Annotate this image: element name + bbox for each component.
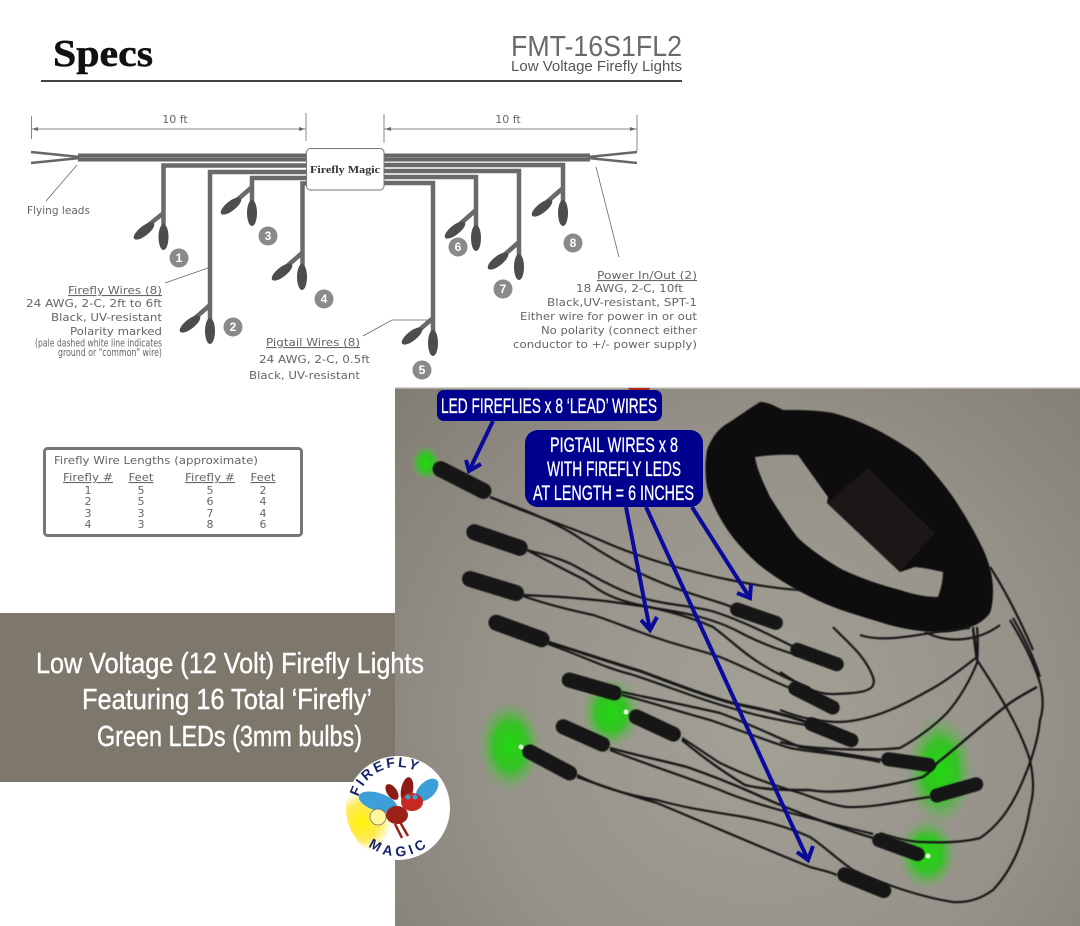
firefly wire 2 xyxy=(177,172,306,344)
label: pigtail wires: Black, UV-resistant xyxy=(249,369,361,382)
label: power in/out: Power In/Out (2) xyxy=(597,269,697,282)
LED bright points xyxy=(518,710,930,858)
junction box: Firefly Magic: Firefly Magic xyxy=(310,164,380,176)
table: firefly wire lengths: 1 xyxy=(84,484,92,497)
wire bundle xyxy=(490,497,1043,902)
label: firefly wires: Polarity marked xyxy=(70,325,162,338)
firefly wire 3: 3 xyxy=(265,229,272,243)
label: power in/out: 18 AWG, 2-C, 10ft xyxy=(576,282,684,295)
product subtitle: Low Voltage Firefly Lights xyxy=(511,58,682,75)
heading: Specs: Specs xyxy=(53,33,153,75)
firefly wire 3 xyxy=(218,178,306,246)
dimension: left 10 ft: 10 ft xyxy=(162,113,188,126)
firefly wire 2: 2 xyxy=(230,320,237,334)
callout: pigtail wires xyxy=(525,430,703,507)
table: firefly wire lengths: 5 xyxy=(138,484,144,497)
arrow: pigtail two xyxy=(692,507,751,598)
banner: product description: Green LEDs (3mm bulbs) xyxy=(97,721,362,753)
table: firefly wire lengths: 7 xyxy=(206,507,214,520)
label: firefly wires: ground or "common" wire) xyxy=(58,346,162,359)
callout: LED fireflies xyxy=(437,390,662,421)
arrow: pigtail one xyxy=(626,507,657,630)
callout: pigtail wires: AT LENGTH = 6 INCHES xyxy=(533,482,694,505)
callout: pigtail wires: PIGTAIL WIRES x 8 xyxy=(550,434,678,457)
firefly wire 7: 7 xyxy=(500,282,507,296)
model number: FMT-16S1FL2 xyxy=(511,31,682,63)
header xyxy=(41,31,682,82)
table: firefly wire lengths: 4 xyxy=(260,507,266,520)
table: firefly wire lengths: 3 xyxy=(138,507,144,520)
banner: product description: Featuring 16 Total ‘Firefly’ xyxy=(82,684,372,716)
label: pigtail wires: Pigtail Wires (8) xyxy=(266,336,360,349)
logo text xyxy=(350,757,426,856)
callout: LED fireflies: LED FIREFLIES x 8 ‘LEAD’ WIRES xyxy=(441,395,657,418)
photo: firefly light string xyxy=(395,387,1080,926)
table: firefly wire lengths: Firefly # xyxy=(63,471,113,484)
table: firefly wire lengths: 8 xyxy=(206,518,214,531)
table: firefly wire lengths: 3 xyxy=(138,518,144,531)
table: firefly wire lengths: Firefly # xyxy=(185,471,235,484)
firefly wire 4 xyxy=(269,184,334,308)
label: flying leads: Flying leads xyxy=(27,204,90,217)
firefly wire 8: 8 xyxy=(570,236,577,250)
logo wings xyxy=(356,774,443,817)
arrow: lead wires xyxy=(466,421,493,471)
label: power in/out: Either wire for power in or out xyxy=(520,310,698,323)
firefly wire 6 xyxy=(384,177,481,256)
logo text: MAGIC xyxy=(368,838,426,856)
firefly wire 8 xyxy=(384,165,582,252)
table: firefly wire lengths: 4 xyxy=(84,518,92,531)
table: firefly wire lengths: 2 xyxy=(84,495,92,508)
label: flying leads xyxy=(27,165,90,217)
table: firefly wire lengths: Feet xyxy=(128,471,154,484)
label: power in/out: Black,UV-resistant, SPT-1 xyxy=(547,296,697,309)
firefly wire 6: 6 xyxy=(455,240,462,254)
table: firefly wire lengths: 3 xyxy=(84,507,92,520)
table: firefly wire lengths: 5 xyxy=(206,484,214,497)
label: firefly wires: Black, UV-resistant xyxy=(51,311,163,324)
label: firefly wires: 24 AWG, 2-C, 2ft to 6ft xyxy=(26,297,163,310)
table: firefly wire lengths: Feet xyxy=(250,471,276,484)
table: firefly wire lengths: 6 xyxy=(260,518,266,531)
table: firefly wire lengths: 4 xyxy=(260,495,266,508)
banner: product description xyxy=(0,613,424,782)
dimension: right 10 ft: 10 ft xyxy=(495,113,521,126)
logo text: FIREFLY xyxy=(350,757,420,796)
callout: pigtail wires: WITH FIREFLY LEDS xyxy=(547,458,681,481)
label: power in/out: conductor to +/- power supply) xyxy=(513,338,697,351)
label: pigtail wires: 24 AWG, 2-C, 0.5ft xyxy=(259,353,371,366)
green LED glows xyxy=(411,445,974,890)
label: pigtail wires xyxy=(249,320,432,382)
wiring diagram xyxy=(26,113,698,382)
firefly wire 7 xyxy=(384,171,524,298)
junction box: Firefly Magic xyxy=(306,148,384,190)
firefly LED plugs xyxy=(430,458,985,900)
table: firefly wire lengths: 6 xyxy=(206,495,214,508)
label: firefly wires xyxy=(26,268,208,359)
dimension: left 10 ft xyxy=(32,113,306,141)
main wires and flying leads xyxy=(31,152,637,163)
table: firefly wire lengths: 2 xyxy=(260,484,266,497)
arrow: pigtail three xyxy=(646,507,813,860)
label: power in/out: No polarity (connect either xyxy=(541,324,697,337)
firefly wire 5 xyxy=(384,183,438,380)
label: power in/out xyxy=(513,167,698,351)
firefly wire 5: 5 xyxy=(419,363,426,377)
table: firefly wire lengths: 5 xyxy=(138,495,144,508)
firefly wire 4: 4 xyxy=(321,292,328,306)
firefly wire 1: 1 xyxy=(176,251,183,265)
logo firefly body xyxy=(370,776,423,838)
label: firefly wires: Firefly Wires (8) xyxy=(68,284,162,297)
dimension: right 10 ft xyxy=(384,113,637,151)
table: firefly wire lengths: Firefly Wire Lengths (approximate) xyxy=(54,454,258,467)
firefly wire 1 xyxy=(131,166,306,268)
cable coil and control box xyxy=(706,402,993,632)
table: firefly wire lengths xyxy=(44,448,302,536)
logo: Firefly Magic xyxy=(346,756,450,860)
label: firefly wires: (pale dashed white line indicates xyxy=(35,336,162,350)
banner: product description: Low Voltage (12 Volt) Firefly Lights xyxy=(36,648,424,680)
